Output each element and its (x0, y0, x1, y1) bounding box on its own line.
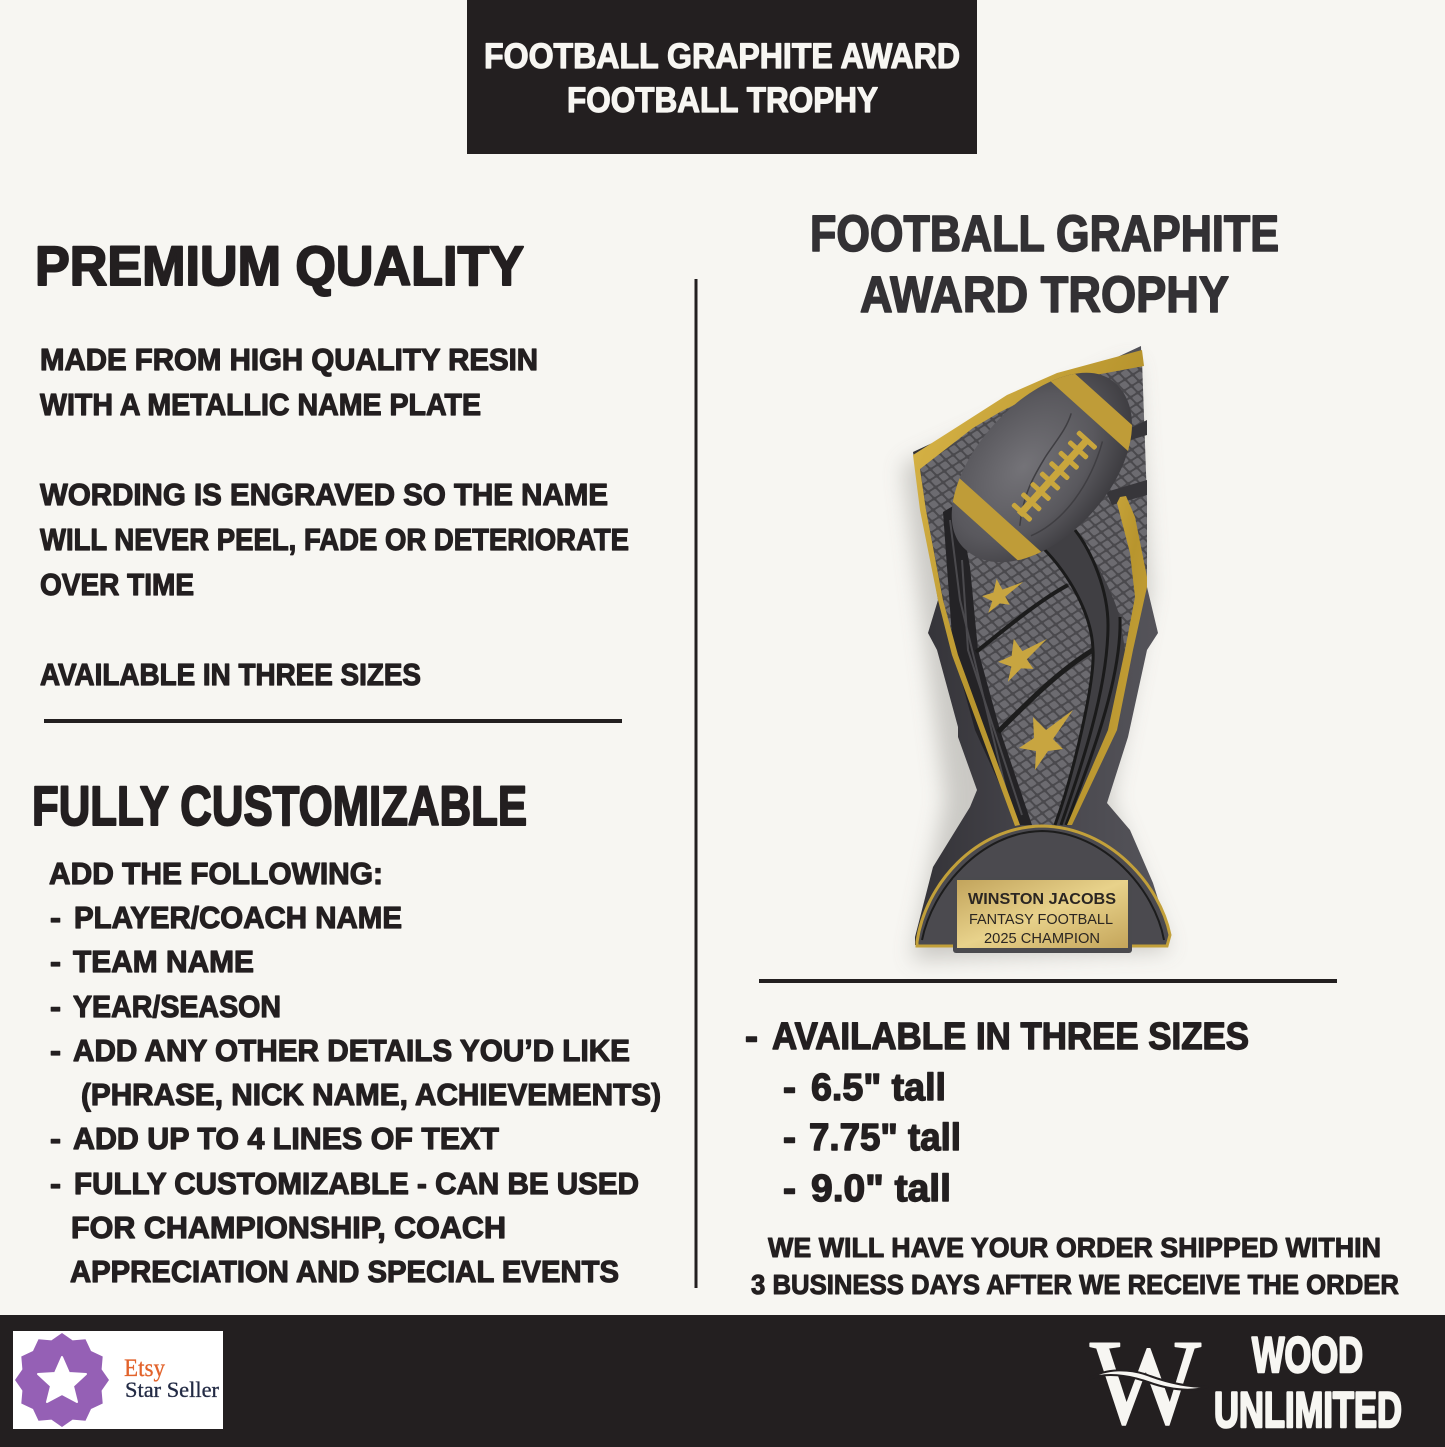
trophy image (903, 332, 1170, 960)
text block: product description: MADE FROM HIGH QUALITY RESIN (40, 342, 538, 377)
mesh panel (920, 360, 1147, 825)
right dark strip band (1042, 530, 1125, 825)
panel: premium quality (35, 234, 629, 692)
text block: available sizes: AVAILABLE IN THREE SIZES (772, 1016, 1249, 1058)
text block: customization list: ADD ANY OTHER DETAILS YOU’D LIKE (73, 1033, 630, 1068)
football (952, 372, 1132, 562)
text block: customization list: FOR CHAMPIONSHIP, COACH (71, 1210, 506, 1245)
text block: customization list (49, 856, 661, 1289)
left dark strip band (943, 503, 1032, 825)
gold frame (913, 350, 1147, 826)
text block: customization list: APPRECIATION AND SPECIAL EVENTS (70, 1254, 619, 1289)
text block: customization list: - (50, 989, 61, 1024)
title banner (467, 0, 977, 154)
footer bar (0, 1315, 1445, 1447)
text block: available sizes: 9.0" tall (811, 1168, 951, 1210)
title banner: FOOTBALL GRAPHITE AWARD (484, 37, 960, 76)
text block: customization list: - (50, 1121, 61, 1156)
trophy body (913, 346, 1170, 945)
heading: product name (810, 205, 1279, 323)
heading: premium quality: PREMIUM QUALITY (35, 234, 524, 297)
text block: customization list: - (50, 1166, 61, 1201)
text block: product description: WORDING IS ENGRAVED SO THE NAME (40, 477, 608, 512)
text block: customization list: PLAYER/COACH NAME (74, 900, 402, 935)
text block: available sizes: 6.5" tall (811, 1067, 946, 1109)
text block: product description: OVER TIME (40, 567, 194, 602)
text block: customization list: ADD UP TO 4 LINES OF TEXT (73, 1121, 499, 1156)
text block: customization list: TEAM NAME (73, 944, 254, 979)
engraved name plate: WINSTON JACOBS (968, 891, 1116, 908)
wood unlimited logo (1089, 1315, 1402, 1447)
engraved name plate: FANTASY FOOTBALL (969, 912, 1113, 928)
cross strips and ledges (976, 420, 1147, 732)
text block: product description: AVAILABLE IN THREE SIZES (40, 657, 421, 692)
text block: available sizes: - (783, 1168, 796, 1210)
icon: W monogram with swoosh: W (1090, 1315, 1201, 1447)
stars (978, 572, 1073, 770)
text block: customization list: (PHRASE, NICK NAME, ACHIEVEMENTS) (81, 1077, 661, 1112)
text block: product description: WILL NEVER PEEL, FADE OR DETERIORATE (40, 522, 629, 557)
text block: available sizes: - (745, 1016, 758, 1058)
icon: purple star badge (15, 1333, 109, 1427)
text block: customization list: - (50, 900, 61, 935)
heading: product name: FOOTBALL GRAPHITE (810, 205, 1279, 262)
text block: customization list: - (50, 944, 61, 979)
heading: product name: AWARD TROPHY (860, 266, 1229, 323)
text block: available sizes: 7.75" tall (809, 1117, 961, 1159)
engraved name plate (953, 877, 1132, 953)
text block: available sizes (745, 1016, 1249, 1210)
text block: available sizes: - (783, 1117, 796, 1159)
engraved name plate: 2025 CHAMPION (984, 931, 1100, 947)
etsy star seller badge: Star Seller (125, 1377, 220, 1402)
text block: customization list: ADD THE FOLLOWING: (49, 856, 383, 891)
panel: fully customizable (32, 774, 661, 1289)
text block: customization list: FULLY CUSTOMIZABLE - CAN BE USED (74, 1166, 639, 1201)
title banner: FOOTBALL TROPHY (567, 81, 878, 120)
text block: shipping note: 3 BUSINESS DAYS AFTER WE RECEIVE THE ORDER (751, 1269, 1399, 1300)
text block: shipping note (751, 1232, 1399, 1300)
football laces (1010, 430, 1098, 523)
text block: available sizes: - (783, 1067, 796, 1109)
etsy star seller badge: Etsy (124, 1355, 165, 1382)
text block: shipping note: WE WILL HAVE YOUR ORDER SHIPPED WITHIN (768, 1232, 1381, 1263)
text block: customization list: - (50, 1033, 61, 1068)
text block: product description: WITH A METALLIC NAME PLATE (40, 387, 481, 422)
text block: customization list: YEAR/SEASON (73, 989, 281, 1024)
wood unlimited logo: WOOD (1252, 1327, 1363, 1383)
etsy star seller badge (13, 1331, 223, 1429)
trophy base dome (917, 826, 1170, 946)
trophy shadow (903, 360, 1170, 960)
heading: fully customizable: FULLY CUSTOMIZABLE (32, 774, 527, 837)
text block: product description (40, 342, 629, 692)
